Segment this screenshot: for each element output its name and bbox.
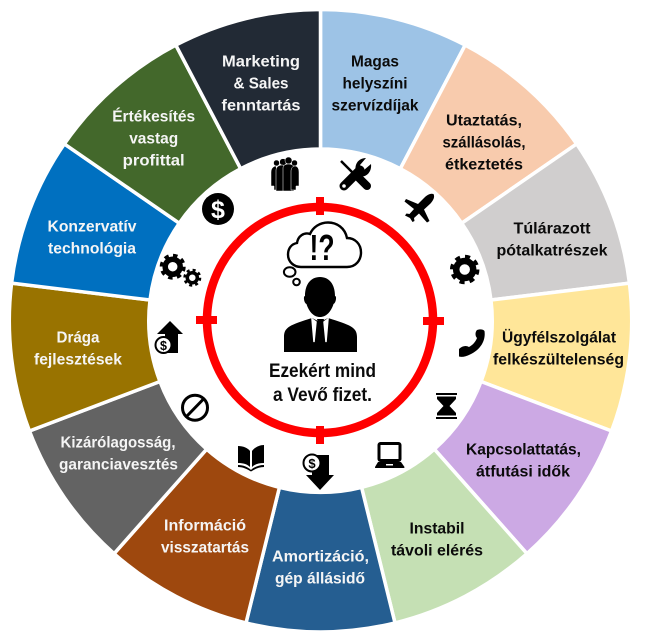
label: Információ visszatartás: visszatartás [161, 540, 249, 556]
label: Drága fejlesztések: Drága [56, 330, 100, 346]
segment: Utaztatás [400, 45, 577, 223]
label: Magas helyszíni szervízdíjak [332, 54, 419, 114]
icon: group of people [271, 157, 299, 191]
label: Értékesítés vastag profittal [112, 106, 195, 170]
icon: wrench and screwdriver [341, 158, 371, 188]
segment: Értékesítés vastag profittal [64, 45, 241, 223]
icon: prohibition sign [182, 395, 208, 420]
label: Kapcsolattatás, átfutási idők: átfutási idők [476, 464, 570, 480]
label: Túlárazott pótalkatrészek: Túlárazott [514, 220, 591, 238]
icon: airplane [404, 194, 434, 222]
icon: telephone handset [459, 329, 485, 357]
center caption: Ezekért mind [269, 361, 376, 382]
icon: hourglass [436, 393, 457, 419]
segment: Magas helyszíni szervízdíjak [320, 9, 465, 169]
icon: dollar coin: $ [211, 196, 225, 224]
label: Drága fejlesztések: fejlesztések [34, 352, 122, 368]
segment: Túlárazott pótalkatrészek [462, 144, 629, 300]
label: Kapcsolattatás, átfutási idők: Kapcsolattatás, [466, 442, 581, 458]
icon: thought cloud with !?: !? [310, 227, 334, 268]
icon: thought cloud with !? [284, 222, 361, 285]
segment: Instabil távoli elérés [362, 449, 527, 623]
icon: businessman silhouette [284, 277, 357, 352]
label: Amortizáció, gép állásidő [272, 548, 369, 588]
label: Instabil távoli elérés [391, 520, 483, 560]
segment: Információ visszatartás [114, 449, 279, 623]
label: Utaztatás, szállásolás, étkeztetés: étkeztetés [445, 156, 523, 174]
icon: open book [238, 445, 264, 472]
label: Túlárazott pótalkatrészek [496, 220, 608, 260]
icon: two gears [162, 256, 200, 285]
label: Utaztatás, szállásolás, étkeztetés: szállásolás, [442, 134, 526, 152]
label: Ügyfélszolgálat felkészültelenség: felkészültelenség [493, 352, 624, 368]
label: Információ visszatartás: Információ [164, 518, 246, 534]
icon: laptop [375, 444, 404, 468]
label: Marketing & Sales fenntartás: & Sales [234, 76, 289, 92]
icon: dollar coin with up arrow: $ [160, 339, 167, 353]
segment: Amortizáció [246, 487, 395, 632]
icon: dollar coin [202, 193, 234, 225]
label: Kizárólagosság, garanciavesztés [59, 434, 178, 474]
label: Amortizáció, gép állásidő: Amortizáció, [272, 548, 369, 566]
label: Értékesítés vastag profittal: Értékesítés [112, 106, 195, 126]
label: Ügyfélszolgálat felkészültelenség [493, 328, 624, 368]
label: Konzervatív technológia [48, 218, 137, 258]
icon: dollar coin with down arrow [304, 454, 334, 490]
label: Marketing & Sales fenntartás: Marketing [222, 54, 300, 70]
label: Marketing & Sales fenntartás [222, 54, 301, 114]
center caption [269, 361, 376, 406]
icon: gear [452, 257, 477, 282]
label: Túlárazott pótalkatrészek: pótalkatrészek [496, 242, 608, 260]
segment: Marketing & Sales [176, 9, 320, 169]
label: Utaztatás, szállásolás, étkeztetés: Utaztatás, [446, 112, 522, 130]
label: Kapcsolattatás, átfutási idők [466, 442, 581, 480]
label: Magas helyszíni szervízdíjak: szervízdíjak [332, 98, 419, 114]
segment: Ügyfélszolgálat [481, 283, 632, 431]
label: Kizárólagosság, garanciavesztés: Kizárólagosság, [60, 434, 176, 452]
label: Magas helyszíni szervízdíjak: Magas [351, 54, 399, 70]
label: Utaztatás, szállásolás, étkeztetés [442, 112, 526, 174]
segment: Konzervatív technológia [12, 144, 179, 300]
center caption: a Vevő fizet. [273, 385, 372, 406]
segment: Kizárólagosság [29, 382, 207, 554]
red target ring [196, 197, 444, 444]
label: Értékesítés vastag profittal: profittal [123, 152, 185, 170]
label: Konzervatív technológia: technológia [48, 240, 136, 258]
label: Magas helyszíni szervízdíjak: helyszíni [342, 76, 408, 92]
label: Amortizáció, gép állásidő: gép állásidő [275, 570, 365, 588]
label: Drága fejlesztések [34, 330, 122, 368]
label: Értékesítés vastag profittal: vastag [129, 130, 178, 148]
label: Kizárólagosság, garanciavesztés: garanciavesztés [59, 456, 178, 474]
label: Marketing & Sales fenntartás: fenntartás [222, 98, 301, 114]
label: Ügyfélszolgálat felkészültelenség: Ügyfélszolgálat [502, 328, 617, 346]
segment: Drága fejlesztések [9, 283, 160, 431]
segment: Kapcsolattatás [434, 382, 612, 554]
label: Információ visszatartás [161, 518, 249, 556]
icon: dollar coin with down arrow: $ [308, 456, 316, 471]
label: Konzervatív technológia: Konzervatív [48, 218, 137, 236]
label: Instabil távoli elérés: távoli elérés [391, 542, 483, 560]
icon: dollar coin with up arrow [156, 321, 183, 353]
label: Instabil távoli elérés: Instabil [410, 520, 464, 538]
